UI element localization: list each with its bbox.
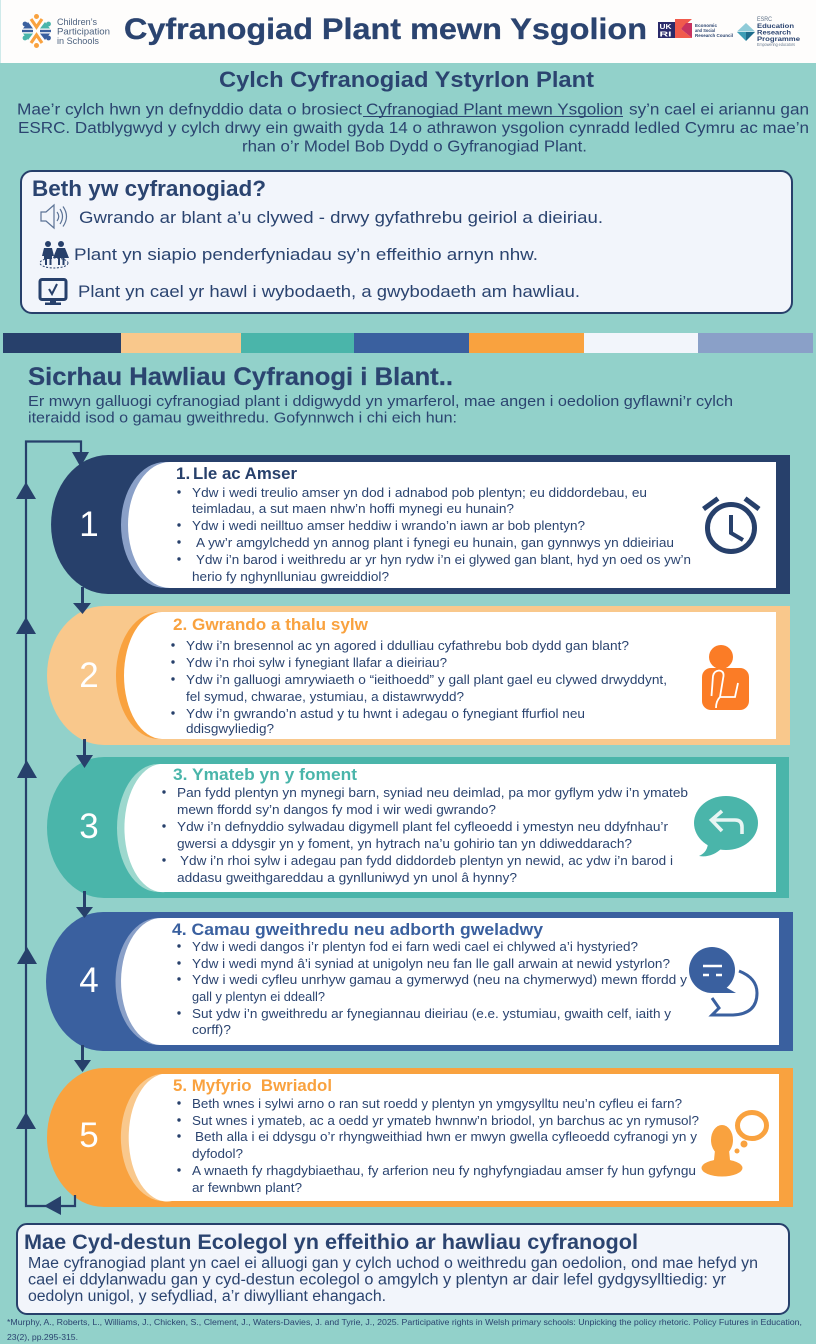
questions 2: Ydw i’n rhoi sylw i fynegiant llafar a dieiriau? [186, 655, 447, 670]
intro paragraph: sy’n cael ei ariannu gan [629, 102, 809, 118]
heading 5: 5. Myfyrio Bwriadol [173, 1076, 332, 1095]
subtitle: Cylch Cyfranogiad Ystyrlon Plant [219, 67, 595, 92]
heading: Beth yw cyfranogiad: Beth yw cyfranogiad? [32, 176, 266, 201]
logo: ESRC Education Research Programme: ESRC [757, 16, 772, 23]
questions 3: Ydw i’n defnyddio sylwadau digymell plant fel cyfleoedd i ymestyn neu ddyfnhau’r [177, 819, 669, 834]
icon: speaker [41, 205, 66, 228]
footnote: 23(2), pp.295-315. [7, 1332, 78, 1342]
text: ecological context: Mae cyfranogiad plant yn cael ei alluogi gan y cylch uchod o weithredu gan oedolion, ond mae hefyd yn [28, 1255, 758, 1272]
intro paragraph: Mae’r cylch hwn yn defnyddio data o brosiect [17, 102, 363, 118]
questions 1 [177, 485, 691, 584]
questions 3 [162, 785, 688, 885]
intro paragraph [17, 102, 809, 156]
questions 1: Ydw i wedi neilltuo amser heddiw i wrando’n iawn ar bob plentyn? [192, 518, 585, 533]
logo: UKRI: UK [660, 24, 672, 31]
icon: children [40, 241, 69, 268]
questions 1: Ydw i’n barod i weithredu ar yr hyn rydw i’n ei glywed gan blant, hyd yn oed os yw’n [196, 552, 691, 567]
questions 5: dyfodol? [192, 1146, 243, 1161]
text: ecological context: cael ei ddylanwadu gan y cyd-destun ecolegol o amgylch y plentyn ar dair lefel gydgysylltiedig: yr [28, 1272, 726, 1288]
logo: Children's Participation in Schools [22, 14, 110, 48]
heading 1: 1. [176, 464, 190, 483]
icon: monitor [40, 280, 66, 305]
title: Cyfranogiad Plant mewn Ysgolion [124, 13, 647, 46]
text: section intro: Er mwyn galluogi cyfranogiad plant i ddigwydd yn ymarferol, mae angen i oedolion gyflawni’r cylch [28, 393, 733, 410]
text: listening: Gwrando ar blant a’u clywed - drwy gyfathrebu geiriol a dieiriau. [79, 209, 603, 227]
icon: feedback bubbles [689, 947, 757, 1015]
icon: reflecting person [702, 1112, 766, 1176]
footnote: *Murphy, A., Roberts, L., Williams, J., Chicken, S., Clement, J., Waters-Davies, J. and Tyrie, J., 2025. Participative rights in Welsh primary schools: Unpicking the policy rhetoric. Policy Futures in Education, [7, 1317, 802, 1327]
logo: ESRC Education Research Programme: Empowering educators [757, 42, 795, 48]
heading 3: 3. Ymateb yn y foment [173, 765, 357, 784]
questions 3: addasu gweithgareddau a gynlluniwyd yn unol â hynny? [177, 870, 517, 885]
logo: ESRC Education Research Programme [737, 16, 800, 48]
questions 1: teimladau, a sut maen nhw’n hoffi mynegi eu hunain? [192, 501, 514, 516]
panel: step 5 [47, 1068, 793, 1207]
questions 2: Ydw i’n gwrando’n astud y tu hwnt i adegau o fynegiant ffurfiol neu [186, 706, 585, 721]
panel: step 1 [51, 455, 790, 594]
heading 4: 4. Camau gweithredu neu adborth gweladwy [172, 920, 544, 939]
text: section intro: iteraidd isod o gamau gweithredu. Gofynnwch i chi eich hun: [28, 410, 457, 426]
logo: UKRI: Economic [695, 23, 717, 28]
intro paragraph: rhan o’r Model Bob Dydd o Gyfranogiad Plant. [242, 138, 587, 156]
questions 5: Sut wnes i ymateb, ac a oedd yr ymateb hwnnw’n briodol, yn barchus ac yn rymusol? [192, 1113, 699, 1128]
questions 4: Ydw i wedi mynd â’i syniad at unigolyn neu fan lle gall arwain at newid ystyrlon? [192, 956, 670, 971]
text: right to information: Plant yn cael yr hawl i wybodaeth, a gwybodaeth am hawliau. [78, 283, 580, 301]
questions 3: mewn ffordd sy’n dangos fy mod i wir wedi gwrando? [177, 802, 496, 817]
logo: UKRI: RI [660, 32, 672, 38]
logo: UKRI [658, 19, 733, 38]
questions 3: gwersi a ddysgir yn y foment, yn hytrach na’u gohirio tan yn ddiweddarach? [177, 836, 632, 851]
questions 5: Beth alla i ei ddysgu o’r rhyngweithiad hwn er mwyn gwella cyfleoedd cyfranogi yn y [195, 1129, 698, 1144]
questions 4: Ydw i wedi dangos i’r plentyn fod ei farn wedi cael ei chlywed a’i hystyried? [192, 939, 638, 954]
logo: UKRI: Research Council [695, 33, 733, 38]
questions 2: Ydw i’n galluogi amrywiaeth o “ieithoedd” y gall plant gael eu clywed drwyddynt, [186, 672, 667, 687]
questions 5: ar fewnbwn plant? [192, 1180, 302, 1195]
logo: Children's Participation in Schools: Children’s [57, 17, 97, 28]
questions 5 [177, 1096, 699, 1195]
questions 5: A wnaeth fy rhagdybiaethau, fy arferion neu fy nghyfyngiadau amser fy hun gyfyngu [192, 1163, 696, 1178]
questions 1: Ydw i wedi treulio amser yn dod i adnabod pob plentyn; eu diddordebau, eu [192, 485, 647, 500]
logo: ESRC Education Research Programme: Education [757, 23, 794, 30]
questions 4: Ydw i wedi cyfleu unrhyw gamau a gymerwyd (neu na chymerwyd) mewn ffordd y [192, 972, 688, 987]
panel: step 4 [46, 912, 793, 1051]
icon: reply speech bubble [694, 796, 758, 856]
footnote [7, 1317, 802, 1342]
logo: ESRC Education Research Programme: Programme [757, 36, 800, 43]
questions 4: corff)? [192, 1022, 231, 1037]
panel: what is participation [21, 171, 792, 313]
number 3: 3 [79, 807, 99, 846]
panel: step 2 [47, 606, 790, 745]
icon: person listening [702, 645, 749, 710]
questions 4: Sut ydw i’n gweithredu ar fynegiannau dieiriau (e.e. ystumiau, gwaith celf, iaith y [192, 1006, 672, 1021]
questions 2 [171, 638, 667, 736]
questions 3: Pan fydd plentyn yn mynegi barn, syniad neu deimlad, pa mor gyflym ydw i’n ymateb [177, 785, 688, 800]
logo: Children's Participation in Schools: in Schools [57, 36, 99, 47]
heading: ecological context: Mae Cyd-destun Ecolegol yn effeithio ar hawliau cyfranogol [24, 1231, 638, 1254]
questions 2: fel symud, chwarae, ystumiau, a distawrwydd? [186, 689, 464, 704]
panel: step 3 [47, 757, 789, 898]
logo: UKRI: and Social [695, 28, 715, 33]
number 1: 1 [79, 505, 99, 544]
questions 4: gall y plentyn ei ddeall? [192, 989, 325, 1004]
logo: ESRC Education Research Programme: Research [757, 30, 791, 36]
intro paragraph: Cyfranogiad Plant mewn Ysgolion [366, 102, 623, 118]
number 4: 4 [79, 961, 99, 1000]
colour stripe [3, 333, 813, 353]
panel: ecological context [17, 1224, 789, 1314]
questions 4 [177, 939, 688, 1037]
questions 1: A yw’r amgylchedd yn annog plant i fynegi eu hunain, gan gynnwys yn ddieiriau [196, 535, 674, 550]
text: ecological context [28, 1255, 758, 1305]
heading 2: 2. Gwrando a thalu sylw [173, 615, 369, 634]
header band [0, 0, 816, 63]
questions 1: herio fy nghynlluniau gwreiddiol? [192, 569, 389, 584]
questions 3: Ydw i’n rhoi sylw i adegau pan fydd diddordeb plentyn yn newid, ac ydw i’n barod i [180, 853, 673, 868]
number 5: 5 [79, 1116, 99, 1155]
questions 5: Beth wnes i sylwi arno o ran sut roedd y plentyn yn ymgysylltu neu’n cyfleu ei farn? [192, 1096, 682, 1111]
text: ecological context: oedolyn unigol, y sefydliad, a’r diwylliant ehangach. [28, 1288, 386, 1305]
cycle arrows [16, 442, 93, 1215]
heading 1: Lle ac Amser [193, 464, 297, 483]
number 2: 2 [79, 656, 99, 695]
text: section intro [28, 393, 733, 426]
text: shaping decisions: Plant yn siapio penderfyniadau sy’n effeithio arnyn nhw. [74, 246, 538, 264]
questions 2: Ydw i’n bresennol ac yn agored i ddulliau cyfathrebu bob dydd gan blant? [186, 638, 629, 653]
icon: clock [704, 498, 759, 552]
logo: Children's Participation in Schools: Participation [57, 26, 110, 38]
intro paragraph: ESRC. Datblygwyd y cylch drwy ein gwaith gyda 14 o athrawon ysgolion cynradd ledled Cymru ac mae’n [18, 120, 809, 137]
questions 2: ddisgwyliedig? [186, 721, 274, 736]
heading: Sicrhau Hawliau: Sicrhau Hawliau Cyfranogi i Blant.. [28, 363, 453, 391]
